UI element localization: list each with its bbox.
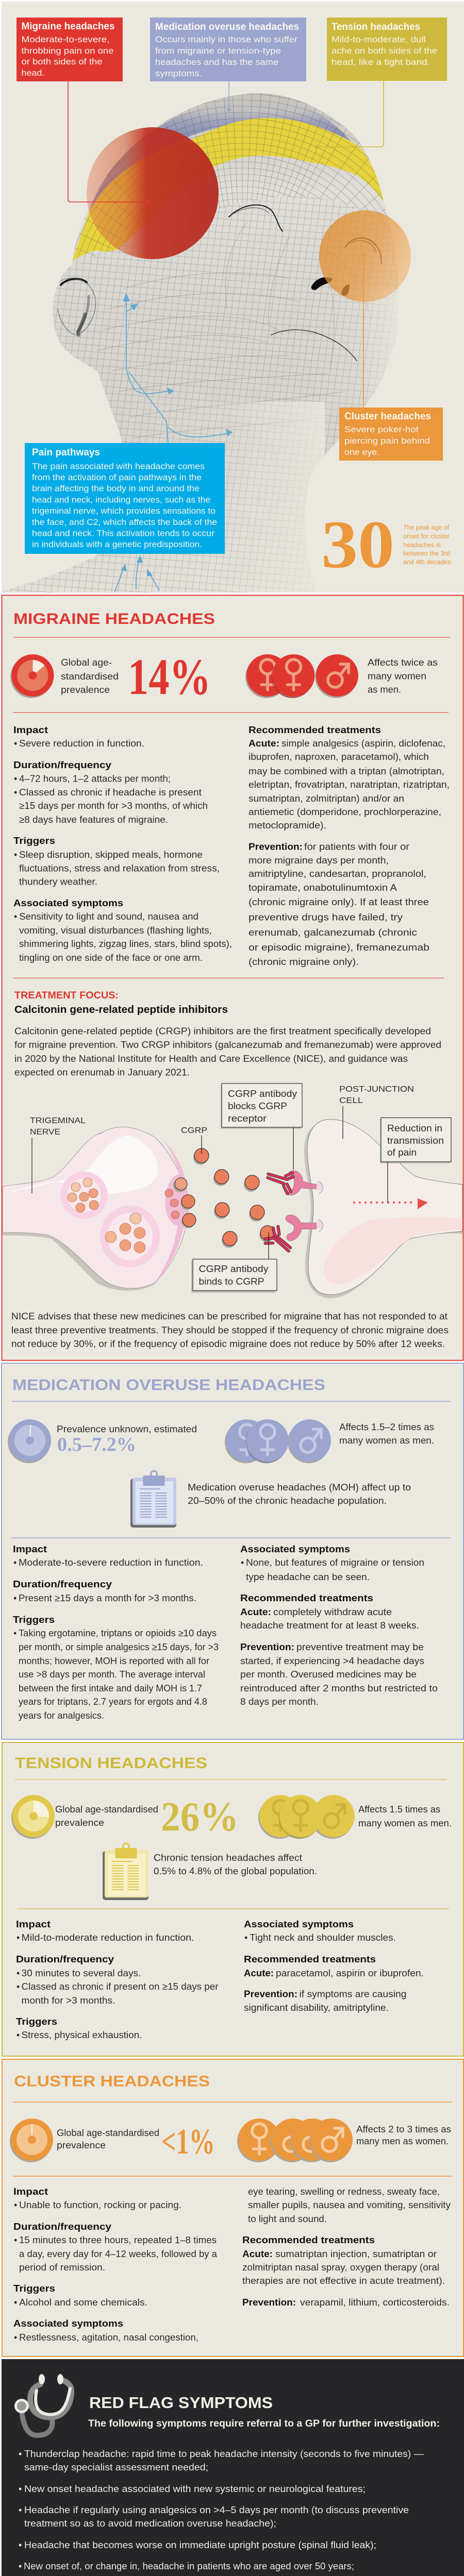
text: impact and triggers column: between the first intake and daily MOH is 1.7 bbox=[19, 1683, 202, 1693]
text: recommended treatments column: amitriptyline, candesartan, propranolol, bbox=[248, 869, 426, 879]
hero panel: head diagram bbox=[0, 2, 464, 598]
text: symptoms and treatments column: significant disability, amitriptyline. bbox=[244, 2003, 389, 2013]
stat: peak age 30: onset for cluster bbox=[403, 532, 450, 540]
text: gender ratio: Affects 2 to 3 times as bbox=[356, 2124, 451, 2134]
icon: prevalence dial bbox=[10, 2119, 53, 2162]
callout: cluster headaches: Severe poker-hot bbox=[344, 425, 419, 434]
callout: antibody binds to CGRP: binds to CGRP bbox=[199, 1277, 264, 1287]
text: gender ratio: many men as women. bbox=[356, 2136, 449, 2146]
text: impact and duration column: ≥15 days per month for >3 months, of which bbox=[19, 801, 208, 811]
text: chronic tension population bbox=[154, 1853, 317, 1876]
callout: pain pathways: The pain associated with headache comes bbox=[32, 462, 205, 471]
text: recommended treatments column: Acute: bbox=[248, 738, 279, 749]
list: red flag symptoms: • bbox=[19, 2561, 22, 2571]
panel: medication overuse headaches bbox=[2, 1363, 463, 1739]
text: symptoms and treatments column: Recommended treatments bbox=[244, 1954, 376, 1964]
text: symptoms and treatments column: • bbox=[244, 1933, 247, 1943]
connector lines bbox=[68, 81, 384, 408]
text: symptoms and treatments column: Associated symptoms bbox=[240, 1544, 350, 1554]
text: impact and triggers column: Triggers bbox=[13, 2283, 55, 2294]
callout: tension headaches: Tension headaches bbox=[332, 22, 420, 32]
callout: antibody blocks receptor: CGRP antibody bbox=[228, 1089, 297, 1099]
text: impact and triggers column: years for analgesics. bbox=[19, 1710, 104, 1721]
text: global prevalence: prevalence bbox=[61, 685, 110, 695]
stat: peak age 30: between the 3rd bbox=[403, 549, 450, 557]
icon: prevalence pie 14% bbox=[10, 654, 54, 698]
text: global prevalence: Global age- bbox=[61, 657, 112, 668]
list: red flag symptoms: Headache that becomes worse on immediate upright posture (spinal fluid leak); bbox=[24, 2540, 376, 2550]
list: red flag symptoms: same-day specialist assessment needed; bbox=[24, 2462, 208, 2472]
callout: tension headaches: head, like a tight band. bbox=[332, 57, 430, 67]
text: treatment focus: Calcitonin gene-related peptide (CRGP) inhibitors are the first treatment specifically developed bbox=[14, 1026, 431, 1037]
callout: medication overuse headaches: from migraine or tension-type bbox=[155, 46, 281, 56]
head wireframe illustration bbox=[0, 93, 399, 592]
text: impact and duration column: Impact bbox=[13, 725, 48, 735]
text: MOH population: 20–50% of the chronic headache population. bbox=[188, 1496, 387, 1506]
text: impact and triggers column: Unable to function, rocking or pacing. bbox=[19, 2200, 181, 2210]
text: recommended treatments column: more migraine days per month, bbox=[248, 855, 389, 866]
icon: clipboard bbox=[103, 1843, 148, 1900]
text: impact and triggers column: Taking ergotamine, triptans or opioids ≥10 days bbox=[19, 1628, 217, 1638]
callout: medication overuse headaches: symptoms. bbox=[155, 69, 202, 78]
cluster pain zone bbox=[319, 210, 411, 302]
text: recommended treatments column: sumatriptan, zolmitriptan) and/or an bbox=[248, 793, 404, 804]
list: red flag symptoms: New onset of, or change in, headache in patients who are aged over 50 years; bbox=[24, 2561, 354, 2571]
text: symptoms and treatments column: None, but features of migraine or tension bbox=[246, 1557, 424, 1568]
text: impact and duration column: tingling on one side of the face or one arm. bbox=[19, 953, 203, 963]
label: trigeminal nerve: TRIGEMINAL bbox=[30, 1116, 86, 1125]
text: symptoms and treatments column: smaller pupils, nausea and vomiting, sensitivity bbox=[248, 2200, 451, 2210]
text: gender ratio: Affects 1.5–2 times as bbox=[339, 1422, 434, 1432]
text: NICE guidance: not reduce by 30%, or if the frequency of episodic migraine does not reduce by 50% after 12 weeks. bbox=[11, 1338, 445, 1349]
text: symptoms and treatments column: Prevention: bbox=[240, 1642, 294, 1652]
text: impact and triggers column: • bbox=[13, 1628, 16, 1638]
text: symptoms and treatments column: paracetamol, aspirin or ibuprofen. bbox=[276, 1968, 424, 1978]
text: impact and duration column: Associated symptoms bbox=[13, 898, 123, 908]
callout: pain pathways: head and neck. This activation tends to occur bbox=[32, 529, 214, 538]
text: symptoms and treatments column: per month. Overused medicines may be bbox=[240, 1669, 417, 1680]
text: recommended treatments column: eletriptan, frovatriptan, naratriptan, rizatriptan, bbox=[248, 779, 450, 790]
text: global prevalence bbox=[61, 657, 119, 695]
callout: pain pathways: Pain pathways bbox=[32, 447, 100, 458]
callout: pain pathways: in individuals with a genetic predisposition. bbox=[32, 539, 202, 549]
text: impact and triggers column: years for triptans, 2.7 years for ergots and 4.8 bbox=[19, 1697, 207, 1707]
icon: gender ratio bbox=[225, 1419, 331, 1463]
callout: pain pathways: from the activation of pain pathways in the bbox=[32, 472, 202, 482]
text: impact and triggers column bbox=[13, 1544, 219, 1721]
icon: prevalence dial bbox=[8, 1419, 51, 1463]
text: symptoms and treatments column: 8 days per month. bbox=[240, 1697, 319, 1707]
text: impact and duration column: • bbox=[14, 850, 17, 860]
text: symptoms and treatments column bbox=[242, 2187, 451, 2308]
list: red flag symptoms: New onset headache associated with new systemic or neurological features; bbox=[24, 2484, 366, 2494]
text: impact and triggers column: period of remission. bbox=[19, 2262, 105, 2273]
pain pathway arrows bbox=[114, 293, 233, 592]
text: affects twice as many women: many women bbox=[368, 671, 426, 681]
text: impact and triggers column: months; however, MOH is reported with all for bbox=[19, 1656, 209, 1666]
callout: antibody blocks receptor: blocks CGRP bbox=[228, 1101, 287, 1111]
heading: red flag symptoms: RED FLAG SYMPTOMS bbox=[89, 2394, 273, 2412]
panel: tension headaches bbox=[2, 1742, 463, 2056]
text: symptoms and treatments column: type headache can be seen. bbox=[246, 1572, 370, 1582]
text: recommended treatments column: simple analgesics (aspirin, diclofenac, bbox=[281, 738, 445, 749]
text: impact and duration column: Severe reduction in function. bbox=[19, 738, 144, 749]
text: symptoms and treatments column: preventive treatment may be bbox=[296, 1642, 424, 1652]
text: chronic tension population: 0.5% to 4.8% of the global population. bbox=[154, 1866, 317, 1876]
text: NICE guidance bbox=[11, 1311, 449, 1349]
text: treatment focus: Calcitonin gene-related peptide inhibitors bbox=[14, 1004, 228, 1015]
text: symptoms and treatments column bbox=[240, 1544, 438, 1707]
list: red flag symptoms: • bbox=[19, 2505, 22, 2515]
list: red flag symptoms: Headache if regularly using analgesics on >4–5 days per month (to discuss preventive bbox=[24, 2505, 409, 2515]
text: impact and triggers column: • bbox=[14, 2200, 17, 2210]
text: impact and triggers column: Restlessness, agitation, nasal congestion, bbox=[19, 2332, 198, 2343]
text: recommended treatments column: topiramate, onabotulinumtoxin A bbox=[248, 883, 397, 893]
arrow: reduced transmission bbox=[354, 1198, 428, 1209]
callout: migraine headaches: head. bbox=[22, 68, 44, 78]
text: impact and duration column: Triggers bbox=[13, 836, 55, 846]
text: impact and triggers column: • bbox=[16, 1968, 20, 1978]
text: recommended treatments column: Recommended treatments bbox=[248, 725, 381, 735]
icon: gender ratio bbox=[258, 1795, 355, 1839]
post-junction cell bbox=[304, 1120, 462, 1298]
text: symptoms and treatments column: eye tearing, swelling or redness, sweaty face, bbox=[248, 2187, 440, 2197]
label: post-junction cell: CELL bbox=[339, 1096, 363, 1105]
text: symptoms and treatments column: therapies are not effective in acute treatment). bbox=[242, 2276, 445, 2286]
text: impact and duration column: • bbox=[14, 774, 17, 784]
text: chronic tension population: Chronic tension headaches affect bbox=[154, 1853, 302, 1863]
text: gender ratio bbox=[356, 2124, 451, 2146]
text: symptoms and treatments column: sumatriptan injection, sumatriptan or bbox=[275, 2249, 437, 2259]
text: impact and duration column: 4–72 hours, 1–2 attacks per month; bbox=[19, 774, 171, 784]
text: symptoms and treatments column: to light and sound. bbox=[248, 2214, 327, 2224]
callout: antibody blocks receptor bbox=[221, 1083, 302, 1170]
text: impact and triggers column: Duration/frequency bbox=[13, 2222, 111, 2232]
text: recommended treatments column: metoclopramide). bbox=[248, 820, 326, 831]
diagram: CGRP mechanism bbox=[3, 1083, 462, 1298]
text: impact and duration column: Classed as chronic if headache is present bbox=[19, 787, 202, 798]
text: impact and triggers column: Mild-to-moderate reduction in function. bbox=[22, 1933, 194, 1943]
text: recommended treatments column: for patients with four or bbox=[304, 842, 409, 852]
text: impact and duration column bbox=[13, 725, 232, 963]
text: impact and duration column: fluctuations, stress and relaxation from stress, bbox=[19, 863, 220, 874]
text: prevalence estimate: 0.5–7.2% bbox=[57, 1434, 136, 1455]
text: affects twice as many women bbox=[368, 657, 438, 694]
text: impact and duration column: • bbox=[14, 738, 17, 749]
text: global prevalence: Global age-standardised bbox=[55, 1804, 158, 1815]
heading: cluster headaches: CLUSTER HEADACHES bbox=[14, 2073, 210, 2090]
text: treatment focus: for migraine prevention. Two CRGP inhibitors (galcanezumab and fremanezumab) were approved bbox=[14, 1040, 441, 1050]
list: red flag symptoms: Thunderclap headache: rapid time to peak headache intensity (seconds to five minutes) — bbox=[24, 2449, 424, 2459]
callout: medication overuse headaches: Occurs mainly in those who suffer bbox=[155, 35, 297, 44]
text: symptoms and treatments column: if symptoms are causing bbox=[299, 1989, 406, 1999]
callout: medication overuse headaches bbox=[150, 18, 306, 81]
text: impact and duration column: Duration/frequency bbox=[13, 760, 111, 770]
text: treatment focus bbox=[14, 990, 441, 1078]
callout: pain pathways: trigeminal nerve, which provides sensations to bbox=[32, 506, 216, 516]
callout: cluster headaches: Cluster headaches bbox=[344, 411, 431, 422]
callout: pain pathways: head and neck, including nerves, such as the bbox=[32, 495, 210, 505]
callout: migraine headaches: throbbing pain on one bbox=[22, 46, 113, 56]
callout: migraine headaches: or both sides of the bbox=[22, 57, 102, 66]
text: impact and triggers column: per month, or simple analgesics ≥15 days, for >3 bbox=[19, 1642, 219, 1652]
heading: medication overuse headaches: MEDICATION OVERUSE HEADACHES bbox=[12, 1377, 325, 1394]
receptors and antibodies bbox=[265, 1171, 323, 1251]
text: recommended treatments column: (chronic migraine only). bbox=[248, 957, 359, 967]
text: gender ratio: many women as men. bbox=[339, 1435, 434, 1446]
text: symptoms and treatments column: headache treatment for at least 8 weeks. bbox=[240, 1620, 419, 1631]
text: impact and triggers column: Moderate-to-severe reduction in function. bbox=[19, 1557, 203, 1568]
callout: reduction in transmission: transmission bbox=[387, 1136, 444, 1146]
text: impact and triggers column: Impact bbox=[13, 2187, 48, 2197]
text: prevalence estimate bbox=[57, 1424, 197, 1455]
text: impact and triggers column: use >8 days per month. The average interval bbox=[19, 1669, 205, 1680]
text: symptoms and treatments column: Acute: bbox=[244, 1968, 274, 1978]
text: global prevalence: Global age-standardised bbox=[57, 2128, 159, 2138]
text: impact and triggers column: • bbox=[14, 2297, 17, 2308]
text: NICE guidance: least three preventive treatments. They should be stopped if the frequency of chronic migraine does bbox=[11, 1325, 449, 1335]
callout: cluster headaches: piercing pain behind bbox=[344, 436, 430, 446]
text: impact and duration column: Sensitivity to light and sound, nausea and bbox=[19, 911, 198, 922]
text: impact and triggers column: • bbox=[13, 1557, 16, 1568]
callout: tension headaches: Mild-to-moderate, dull bbox=[332, 35, 426, 44]
list: red flag symptoms: treatment so as to avoid medication overuse headache); bbox=[24, 2518, 276, 2529]
text: impact and duration column: • bbox=[14, 911, 17, 922]
label: trigeminal nerve bbox=[30, 1116, 86, 1193]
text: gender ratio: Affects 1.5 times as bbox=[358, 1804, 440, 1815]
list: red flag symptoms bbox=[19, 2449, 437, 2576]
text: symptoms and treatments column: completely withdraw acute bbox=[273, 1607, 392, 1617]
text: impact and triggers column: Triggers bbox=[13, 1615, 55, 1625]
text: impact and triggers column: • bbox=[16, 2030, 20, 2040]
text: MOH population: Medication overuse headaches (MOH) affect up to bbox=[188, 1482, 411, 1493]
text: symptoms and treatments column bbox=[244, 1919, 424, 2013]
text: impact and triggers column: Alcohol and some chemicals. bbox=[19, 2297, 147, 2308]
text: impact and triggers column: 30 minutes to several days. bbox=[22, 1968, 141, 1978]
text: impact and triggers column: Stress, physical exhaustion. bbox=[22, 2030, 142, 2040]
text: impact and triggers column: month for >3 months. bbox=[22, 1995, 115, 2006]
text: treatment focus: TREATMENT FOCUS: bbox=[14, 990, 119, 1001]
label: post-junction cell bbox=[339, 1085, 414, 1139]
migraine pain zone bbox=[87, 127, 219, 259]
text: impact and duration column: thundery weather. bbox=[19, 877, 97, 887]
text: recommended treatments column: antiemetic (domperidone, prochlorperazine, bbox=[248, 807, 441, 817]
text: global prevalence: standardised bbox=[61, 671, 119, 682]
text: global prevalence bbox=[57, 2128, 159, 2150]
callout: pain pathways: brain affecting the body in and around the bbox=[32, 484, 200, 494]
text: recommended treatments column: may be combined with a triptan (almotriptan, bbox=[248, 766, 444, 776]
callout: reduction in transmission bbox=[380, 1118, 451, 1202]
text: symptoms and treatments column: started, if experiencing >4 headache days bbox=[240, 1656, 424, 1666]
text: symptoms and treatments column: Associated symptoms bbox=[244, 1919, 354, 1929]
list: red flag symptoms: • bbox=[19, 2449, 22, 2459]
text: impact and triggers column: a day, every day for 4–12 weeks, followed by a bbox=[19, 2249, 218, 2259]
callout: pain pathways bbox=[25, 443, 225, 554]
list: red flag symptoms: • bbox=[19, 2540, 22, 2550]
text: impact and triggers column: Present ≥15 days a month for >3 months. bbox=[19, 1593, 196, 1603]
callout: migraine headaches: Migraine headaches bbox=[22, 21, 114, 32]
label: post-junction cell: POST-JUNCTION bbox=[339, 1085, 414, 1094]
text: NICE guidance: NICE advises that these new medicines can be prescribed for migraine that has not responded to at bbox=[11, 1311, 448, 1321]
stat: peak age 30: 30 bbox=[321, 506, 394, 582]
text: recommended treatments column: Prevention: bbox=[248, 842, 303, 852]
text: affects twice as many women: as men. bbox=[368, 684, 401, 694]
text: treatment focus: in 2020 by the National Institute for Health and Care Excellence (NICE), and guidance was bbox=[14, 1054, 408, 1064]
callout: cluster headaches bbox=[339, 408, 443, 461]
icon: gender ratio bbox=[245, 654, 358, 698]
text: impact and duration column: vomiting, visual disturbances (flashing lights, bbox=[19, 925, 212, 936]
stat: under 1%: <1% bbox=[161, 2122, 215, 2162]
text: impact and triggers column: • bbox=[13, 1593, 16, 1603]
heading: tension headaches: TENSION HEADACHES bbox=[15, 1755, 207, 1772]
text: treatment focus: expected on erenumab in January 2021. bbox=[14, 1067, 190, 1078]
text: symptoms and treatments column: Prevention: bbox=[244, 1989, 297, 1999]
text: global prevalence: prevalence bbox=[55, 1818, 104, 1828]
text: impact and triggers column: Impact bbox=[13, 1544, 47, 1554]
stat: 14%: 14% bbox=[128, 648, 211, 705]
label: CGRP: CGRP bbox=[181, 1126, 207, 1135]
callout: reduction in transmission: Reduction in bbox=[387, 1123, 442, 1133]
text: impact and triggers column: • bbox=[16, 1981, 20, 1992]
text: symptoms and treatments column: • bbox=[241, 1557, 244, 1568]
text: symptoms and treatments column: zolmitriptan nasal spray, oxygen therapy (oral bbox=[242, 2262, 439, 2273]
stat: 26%: 26% bbox=[161, 1794, 239, 1840]
text: impact and duration column: ≥8 days have features of migraine. bbox=[19, 815, 168, 825]
text: impact and triggers column: • bbox=[16, 1933, 20, 1943]
text: symptoms and treatments column: verapamil, lithium, corticosteroids. bbox=[300, 2297, 450, 2308]
callout: migraine headaches bbox=[16, 18, 123, 81]
text: impact and triggers column: 15 minutes to three hours, repeated 1–8 times bbox=[19, 2235, 217, 2245]
text: impact and triggers column: Triggers bbox=[16, 2016, 57, 2027]
text: impact and triggers column: Impact bbox=[16, 1919, 51, 1929]
stat: peak age 30: The peak age of bbox=[403, 523, 449, 531]
text: symptoms and treatments column: Acute: bbox=[242, 2249, 273, 2259]
text: affects twice as many women: Affects twice as bbox=[368, 657, 438, 668]
callout: tension headaches bbox=[327, 18, 447, 81]
callout: migraine headaches: Moderate-to-severe, bbox=[22, 35, 109, 44]
callout: reduction in transmission: of pain bbox=[387, 1147, 417, 1158]
text: recommended treatments column: or episodic migraine), fremanezumab bbox=[248, 942, 429, 953]
icon: prevalence pie 26% bbox=[11, 1795, 55, 1839]
callout: antibody blocks receptor: receptor bbox=[228, 1113, 267, 1124]
icon group: CGRP molecules bbox=[173, 1148, 275, 1248]
text: symptoms and treatments column: Tight neck and shoulder muscles. bbox=[250, 1933, 396, 1943]
list: red flag symptoms: • bbox=[19, 2484, 22, 2494]
text: symptoms and treatments column: Acute: bbox=[240, 1607, 271, 1617]
text: symptoms and treatments column: Prevention: bbox=[242, 2297, 296, 2308]
text: recommended treatments column: (chronic migraine only). If at least three bbox=[248, 897, 429, 907]
text: recommended treatments column bbox=[248, 725, 450, 967]
text: MOH population bbox=[188, 1482, 411, 1506]
callout: antibody binds to CGRP bbox=[191, 1232, 277, 1293]
callout: antibody binds to CGRP: CGRP antibody bbox=[199, 1264, 268, 1274]
text: gender ratio: many women as men. bbox=[358, 1818, 452, 1828]
text: gender ratio bbox=[358, 1804, 452, 1828]
text: impact and duration column: Sleep disruption, skipped meals, hormone bbox=[19, 850, 203, 860]
label: trigeminal nerve: NERVE bbox=[30, 1128, 60, 1137]
text: global prevalence: prevalence bbox=[57, 2140, 106, 2150]
trigeminal nerve bbox=[3, 1127, 188, 1291]
panel: migraine headaches bbox=[2, 596, 463, 1360]
text: impact and triggers column bbox=[16, 1919, 219, 2040]
icon: gender ratio bbox=[237, 2119, 353, 2162]
text: impact and triggers column: Duration/frequency bbox=[13, 1579, 112, 1589]
text: impact and triggers column bbox=[13, 2187, 218, 2343]
icon: stethoscope bbox=[14, 2374, 72, 2435]
text: impact and triggers column: Classed as chronic if present on ≥15 days per bbox=[22, 1981, 219, 1992]
label: CGRP bbox=[181, 1126, 207, 1154]
callout: tension headaches: ache on both sides of the bbox=[332, 46, 437, 56]
panel: cluster headaches bbox=[2, 2059, 463, 2357]
text: impact and triggers column: Associated symptoms bbox=[13, 2318, 123, 2329]
text: symptoms and treatments column: reintroduced after 2 months but restricted to bbox=[240, 1683, 438, 1693]
text: symptoms and treatments column: Recommended treatments bbox=[242, 2235, 375, 2245]
text: impact and duration column: shimmering lights, zigzag lines, stars, blind spots), bbox=[19, 939, 232, 949]
stat: peak age 30: and 4th decades. bbox=[403, 558, 453, 566]
text: recommended treatments column: ibuprofen, naproxen, paracetamol), which bbox=[248, 752, 429, 762]
stat: peak age 30 bbox=[321, 506, 453, 582]
text: prevalence estimate: Prevalence unknown, estimated bbox=[57, 1424, 197, 1434]
callout: cluster headaches: one eye. bbox=[344, 447, 379, 457]
icon: clipboard bbox=[130, 1471, 176, 1528]
panel: red flag symptoms bbox=[2, 2359, 464, 2576]
text: gender ratio bbox=[339, 1422, 434, 1446]
callout: medication overuse headaches: headaches and has the same bbox=[155, 57, 278, 67]
text: global prevalence bbox=[55, 1804, 158, 1828]
text: recommended treatments column: preventive drugs have failed, try bbox=[248, 912, 403, 922]
text: recommended treatments column: erenumab, galcanezumab (chronic bbox=[248, 927, 417, 938]
text: symptoms and treatments column: Recommended treatments bbox=[240, 1593, 373, 1603]
heading: migraine headaches: MIGRAINE HEADACHES bbox=[13, 611, 215, 628]
text: impact and triggers column: Duration/frequency bbox=[16, 1954, 114, 1964]
text: referral intro: The following symptoms require referral to a GP for further investigation: bbox=[88, 2418, 440, 2429]
text: impact and duration column: • bbox=[14, 787, 17, 798]
stat: peak age 30: headaches is bbox=[403, 541, 441, 549]
text: impact and triggers column: • bbox=[14, 2332, 17, 2343]
callout: pain pathways: the face, and C2, which affects the back of the bbox=[32, 517, 217, 527]
callout: medication overuse headaches: Medication overuse headaches bbox=[155, 22, 299, 32]
text: impact and triggers column: • bbox=[14, 2235, 17, 2245]
